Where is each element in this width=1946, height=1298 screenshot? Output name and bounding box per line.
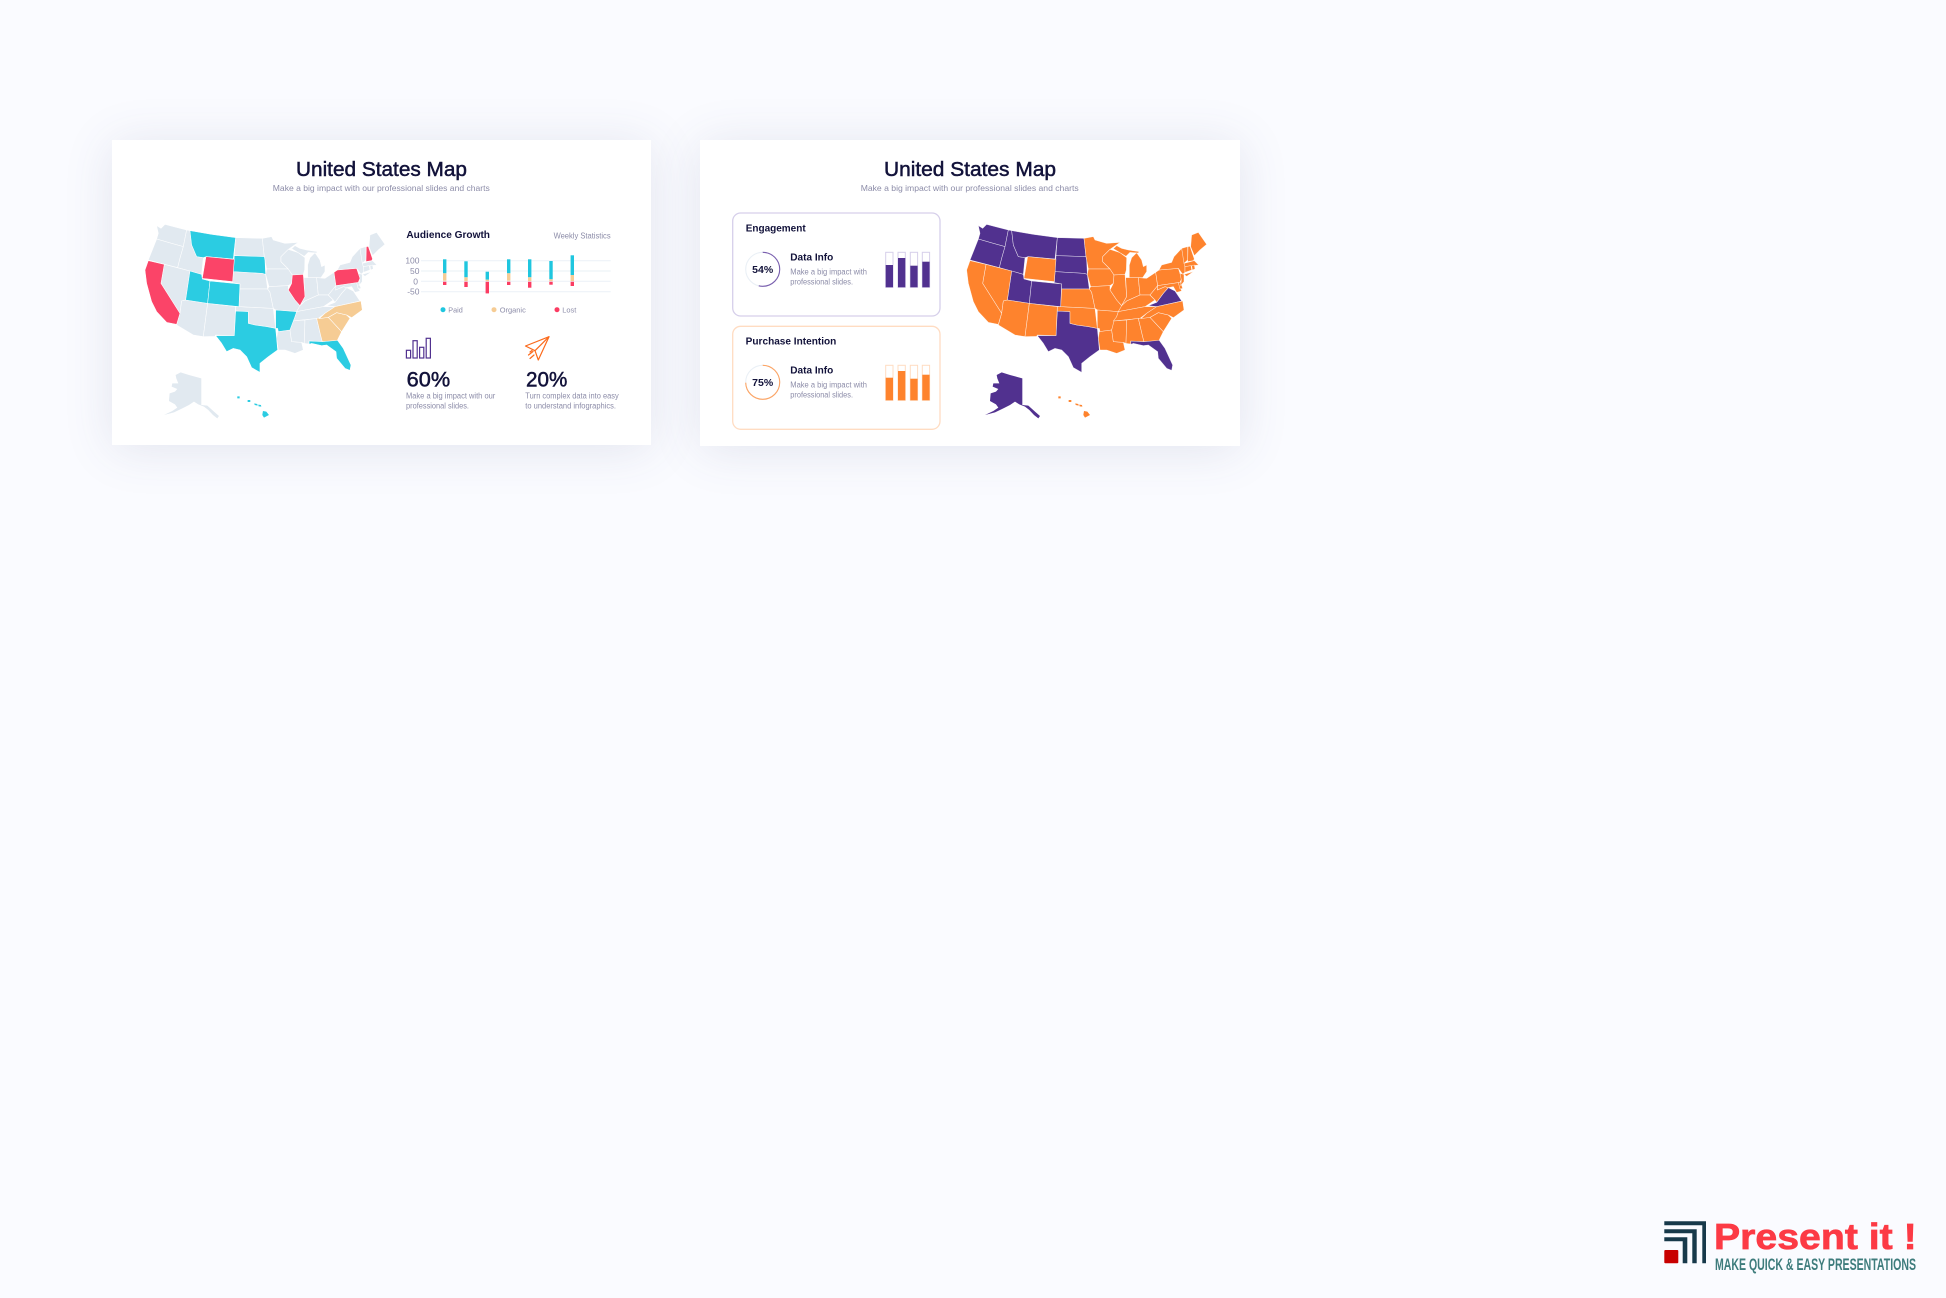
progress ring: 54% (746, 252, 780, 286)
left slide title: United States Map (296, 158, 467, 181)
stat: 20% (525, 369, 619, 410)
panel: Purchase Intention: Purchase Intention (746, 336, 836, 347)
mini bars: engagement (886, 252, 930, 287)
chart heading: Audience Growth: Audience Growth (406, 229, 490, 241)
map: US states highlighted teal, red and peach (145, 224, 385, 418)
icon: paper plane (526, 337, 549, 360)
progress ring: 75% (746, 365, 780, 399)
bar chart: audience growth (405, 255, 611, 297)
progress ring: 54%: 54% (752, 265, 773, 276)
chart subheading: Weekly Statistics: Weekly Statistics (554, 232, 611, 241)
chart legend: Organic (500, 305, 526, 314)
bar chart: audience growth: 100 (405, 256, 420, 266)
progress ring: 75%: 75% (752, 378, 773, 389)
stat: 60% (406, 369, 496, 410)
chart legend: Lost (562, 305, 577, 314)
bar chart: audience growth: 0 (413, 276, 418, 286)
stat: 20%: to understand infographics. (525, 401, 616, 410)
icon: bar chart outline (406, 338, 430, 358)
bar chart: audience growth: 50 (410, 266, 420, 276)
map: US states purple and orange (967, 224, 1207, 418)
panel: Engagement: Engagement (746, 224, 806, 235)
stat: 20%: 20% (526, 369, 567, 392)
panel: Purchase Intention (733, 326, 940, 429)
logo: Present it: Present it ! (1714, 1216, 1917, 1257)
logo mark (1664, 1221, 1706, 1263)
stat: 20%: Turn complex data into easy (525, 391, 619, 400)
bar chart: audience growth: -50 (407, 287, 420, 297)
panel: Engagement: Make a big impact with (790, 267, 867, 276)
right slide subtitle: Make a big impact with our professional slides and charts (861, 183, 1079, 193)
stat: 60%: Make a big impact with our (406, 391, 496, 400)
stat: 60%: professional slides. (406, 401, 469, 410)
panel: Purchase Intention: Data Info (790, 365, 833, 376)
chart legend: Paid (448, 305, 463, 314)
logo: Present it (1664, 1216, 1917, 1274)
slide background: right (700, 140, 1240, 446)
slide background: left (112, 140, 651, 445)
panel: Purchase Intention: Make a big impact with (790, 380, 867, 389)
right slide title: United States Map (884, 158, 1056, 181)
chart legend (440, 305, 577, 314)
panel: Engagement (733, 213, 940, 316)
stat: 60%: 60% (407, 369, 450, 392)
panel: Purchase Intention: professional slides. (790, 390, 853, 399)
panel: Engagement: professional slides. (790, 277, 853, 286)
mini bars: purchase intention (886, 365, 930, 400)
panel: Engagement: Data Info (790, 253, 833, 264)
left slide subtitle: Make a big impact with our professional slides and charts (273, 183, 490, 193)
